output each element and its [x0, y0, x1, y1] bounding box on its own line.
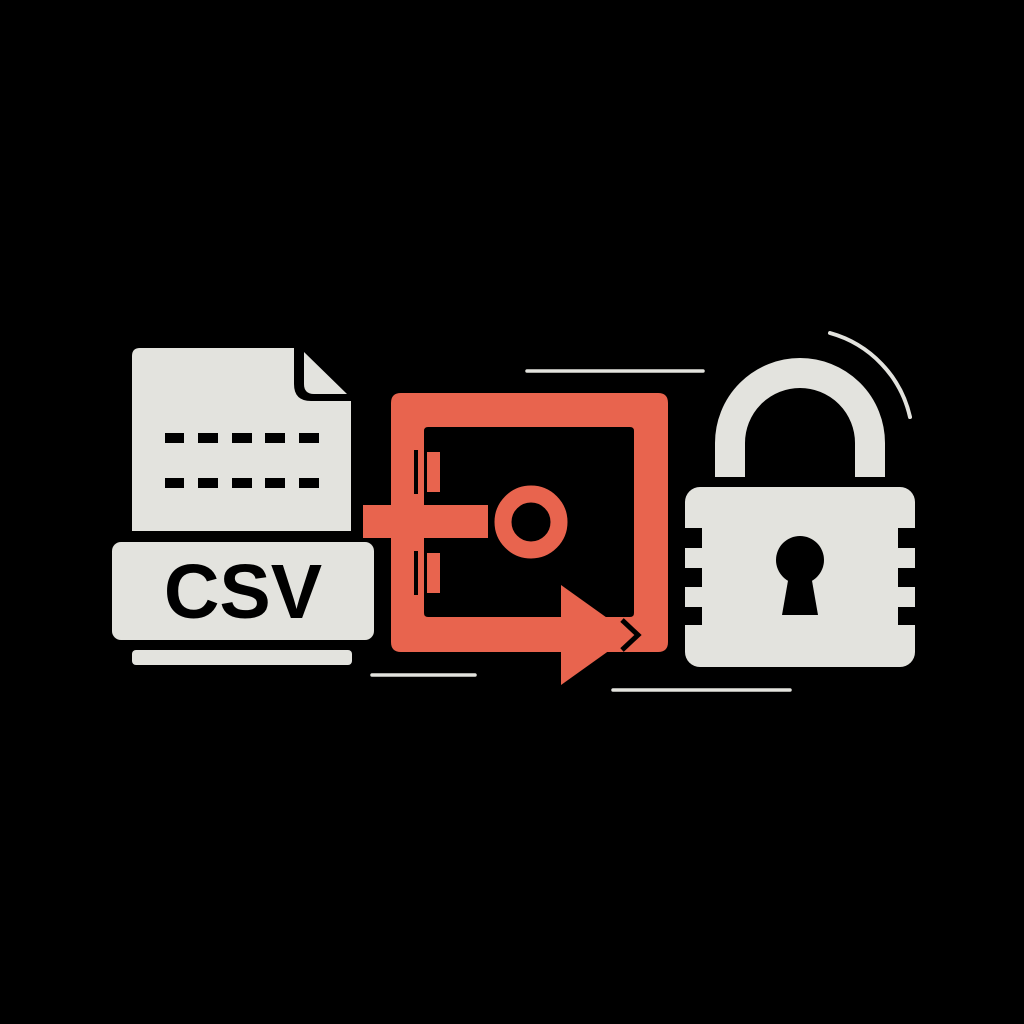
motion lines	[372, 371, 790, 690]
hinge gaps	[414, 450, 418, 494]
icon: folded corner	[304, 352, 347, 394]
connector bar	[363, 505, 488, 538]
csv label	[112, 542, 374, 640]
hinge pieces	[427, 452, 440, 492]
motion arc	[830, 333, 910, 417]
ring	[503, 494, 559, 550]
icon: csv document	[112, 348, 374, 665]
keyhole	[776, 536, 824, 584]
icon: csv document: CSV	[164, 549, 322, 635]
arrow head	[561, 585, 631, 685]
bottom strip	[132, 650, 352, 665]
icon: padlock	[685, 373, 915, 667]
icon: red vault frame with arrow	[363, 393, 668, 685]
